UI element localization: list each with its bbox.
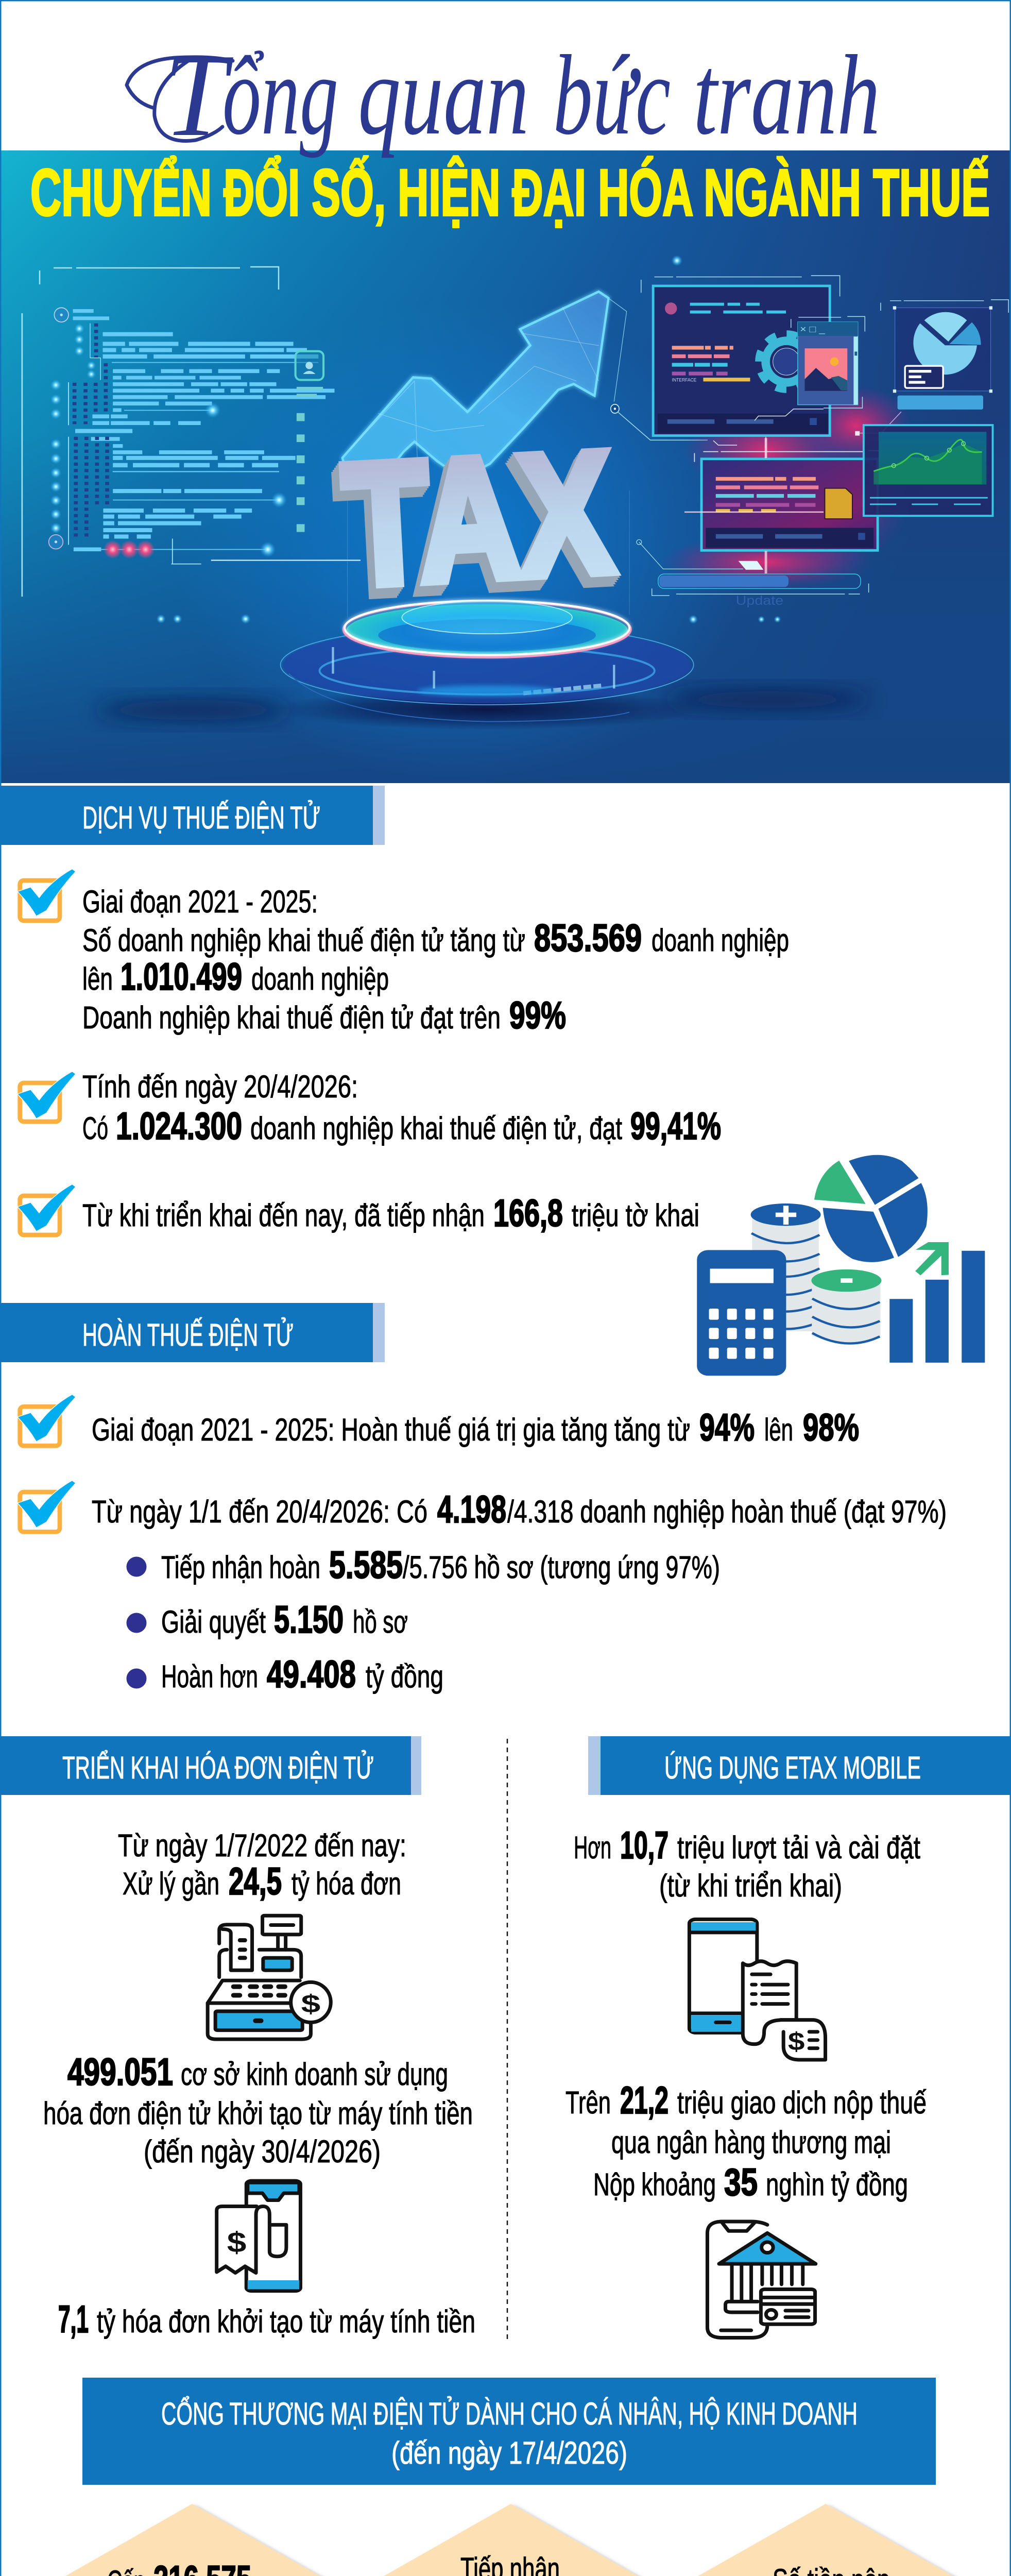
section heading: hoàn thuế điện tử [0,1303,385,1362]
item: giai đoạn 2021-2025: 853.569 [534,917,642,959]
icon: phone with bill [689,1919,826,2060]
panel: image window [713,316,865,458]
section heading: dịch vụ thuế điện tử [0,786,385,845]
text: 10,7 triệu lượt tải [574,1824,920,1903]
title script line: ổng [222,32,338,159]
item: giai đoạn 2021-2025: Doanh nghiệp khai thuế điện tử đạt trên [82,1000,501,1035]
title script line [127,29,880,161]
panel: pie chart [855,300,1008,435]
text: từ ngày 1/7/2022: Từ ngày 1/7/2022 đến nay: [118,1828,406,1863]
title script line: bức [553,32,671,159]
bullet: hoàn hơn: 49.408 [267,1653,356,1696]
dashboards, right side of the banner [637,255,1008,624]
bullet: giải quyết: Giải quyết [161,1604,266,1639]
item: giai đoạn 2021-2025 [18,869,789,1037]
code lines, left side of the banner [22,308,361,624]
item: giai đoạn 2021-2025: doanh nghiệp [251,961,389,996]
item: giai đoạn 2021-2025: lên [82,961,113,996]
holographic platform [275,472,699,730]
item: tính đến ngày 20/4/2026: 1.024.300 [116,1105,242,1147]
item: giai đoạn 2021-2025: Số doanh nghiệp khai thuế điện tử tăng từ [82,923,525,958]
icon: bank on phone [707,2222,816,2338]
icon: calculator, database, pie and bar chart [697,1155,985,1376]
bullet: giải quyết: 5.150 [274,1598,344,1641]
text: 10,7 triệu lượt tải: 10,7 [620,1824,669,1867]
text: 10,7 triệu lượt tải: Hơn [574,1830,611,1865]
item: tính đến ngày 20/4/2026: doanh nghiệp khai thuế điện tử, đạt [250,1111,622,1146]
text: 10,7 triệu lượt tải: triệu lượt tải và cài đặt [677,1830,920,1865]
bullet: tiếp nhận hoàn: /5.756 hồ sơ (tương ứng 97%) [403,1550,720,1585]
icon: phone with receipt: $ [227,2226,246,2259]
item: tính đến ngày 20/4/2026 [18,1069,721,1147]
text: 21,2 triệu giao dịch: Trên [566,2085,611,2120]
bullet: tiếp nhận hoàn: Tiếp nhận hoàn [161,1550,320,1585]
text: từ ngày 1/7/2022 [118,1828,406,1903]
item: từ ngày 1/1 đến 20/4/2026 [18,1481,947,1532]
icon: checkbox [18,869,75,921]
item: tính đến ngày 20/4/2026: Có [82,1111,108,1146]
text: 7,1 tỷ hóa đơn: 7,1 [58,2298,89,2341]
text: từ ngày 1/7/2022: tỷ hóa đơn [292,1866,401,1901]
panel: tiếp nhận chứng từ [371,2504,650,2576]
item: hoàn thuế giá trị gia tăng: 94% [699,1406,755,1449]
item: hoàn thuế giá trị gia tăng: Giai đoạn 2021 - 2025: Hoàn thuế giá trị gia tăng tăng từ [92,1412,690,1447]
item: từ khi triển khai: Từ khi triển khai đến nay, đã tiếp nhận [82,1198,485,1233]
progress bar with Update label [637,255,869,624]
panel: số tiền nộp [686,2504,965,2576]
item: từ khi triển khai [18,1184,699,1235]
banner: cổng thương mại điện tử: (đến ngày 17/4/2026) [391,2435,627,2470]
text: 21,2 triệu giao dịch: 21,2 [620,2079,669,2122]
title script line: T [164,29,233,161]
icon: checkbox [18,1481,75,1532]
item: hoàn thuế giá trị gia tăng [18,1395,859,1449]
item: hoàn thuế giá trị gia tăng: 98% [803,1406,859,1449]
banner: cổng thương mại điện tử [82,2378,936,2485]
text: 21,2 triệu giao dịch [566,2079,927,2204]
section heading: triển khai hóa đơn điện tử [0,1736,421,1795]
bullet: hoàn hơn: tỷ đồng [366,1659,443,1694]
icon: cash register: $ [301,1989,320,2018]
header banner illustration [1,150,1010,783]
item: tính đến ngày 20/4/2026: 99,41% [630,1105,721,1147]
text: 21,2 triệu giao dịch: Nộp khoảng [593,2167,716,2202]
text: 499.051 cơ sở kinh doanh [43,2050,473,2169]
title script line: quan [358,32,529,159]
text: 499.051 cơ sở kinh doanh: cơ sở kinh doanh sử dụng [181,2057,448,2092]
text: 499.051 cơ sở kinh doanh: 499.051 [67,2050,173,2093]
top-left frame brackets [40,267,279,290]
section heading: dịch vụ thuế điện tử: DỊCH VỤ THUẾ ĐIỆN TỬ [82,800,320,835]
text: 21,2 triệu giao dịch: 35 [724,2161,758,2204]
bullet: giải quyết [127,1598,408,1641]
section heading: hoàn thuế điện tử: HOÀN THUẾ ĐIỆN TỬ [82,1317,294,1352]
icon: phone with bill: $ [788,2027,804,2056]
progress bar with Update label: Update [736,594,783,608]
TAX 3D text: TAX [339,415,618,621]
text: 499.051 cơ sở kinh doanh: hóa đơn điện tử khởi tạo từ máy tính tiền [43,2096,473,2131]
bullet: hoàn hơn [127,1653,443,1696]
text: từ ngày 1/7/2022: Xử lý gần [123,1866,219,1901]
text: 499.051 cơ sở kinh doanh: (đến ngày 30/4/2026) [144,2134,381,2169]
item: hoàn thuế giá trị gia tăng: lên [764,1412,793,1447]
bullet: giải quyết: hồ sơ [353,1604,408,1639]
bullet: tiếp nhận hoàn [127,1544,720,1586]
bullet: hoàn hơn: Hoàn hơn [161,1659,258,1694]
item: từ ngày 1/1 đến 20/4/2026: Từ ngày 1/1 đến 20/4/2026: Có [92,1494,427,1529]
icon: cash register [208,1916,331,2039]
section heading: triển khai hóa đơn điện tử: TRIỂN KHAI HÓA ĐƠN ĐIỆN TỬ [62,1750,374,1785]
growth arrow [342,292,708,490]
panel: interface window with gear: INTERFACE [672,377,696,382]
text: 21,2 triệu giao dịch: triệu giao dịch nộp thuế [677,2085,927,2120]
icon: checkbox [18,1395,75,1446]
item: giai đoạn 2021-2025: 99% [509,994,566,1037]
section heading: ứng dụng etax mobile [588,1736,1011,1795]
item: từ ngày 1/1 đến 20/4/2026: 4.198 [437,1488,506,1531]
panel: line chart [864,425,992,516]
item: giai đoạn 2021-2025: 1.010.499 [121,955,242,998]
panel: image window: × □ _ [800,324,826,335]
panel: interface window with gear [641,276,840,435]
bullet: tiếp nhận hoàn: 5.585 [329,1544,403,1586]
item: từ khi triển khai: triệu tờ khai [572,1198,699,1233]
title script line: tranh [693,32,880,159]
panel: document window [684,438,887,573]
item: từ khi triển khai: 166,8 [493,1192,563,1234]
icon: checkbox [18,1184,75,1235]
text: từ ngày 1/7/2022: 24,5 [229,1860,282,1903]
text: 21,2 triệu giao dịch: qua ngân hàng thương mại [611,2125,891,2160]
item: tính đến ngày 20/4/2026: Tính đến ngày 20/4/2026: [82,1069,358,1104]
item: giai đoạn 2021-2025: doanh nghiệp [652,923,789,958]
item: giai đoạn 2021-2025: Giai đoạn 2021 - 2025: [82,884,318,919]
text: 7,1 tỷ hóa đơn [58,2298,475,2341]
icon: phone with receipt [217,2181,300,2291]
text: 21,2 triệu giao dịch: nghìn tỷ đồng [766,2167,908,2202]
text: 10,7 triệu lượt tải: (từ khi triển khai) [659,1868,842,1903]
icon: checkbox [18,1072,75,1122]
panel: cấp mã số thuế [53,2504,332,2576]
text: 7,1 tỷ hóa đơn: tỷ hóa đơn khởi tạo từ máy tính tiền [97,2304,475,2339]
